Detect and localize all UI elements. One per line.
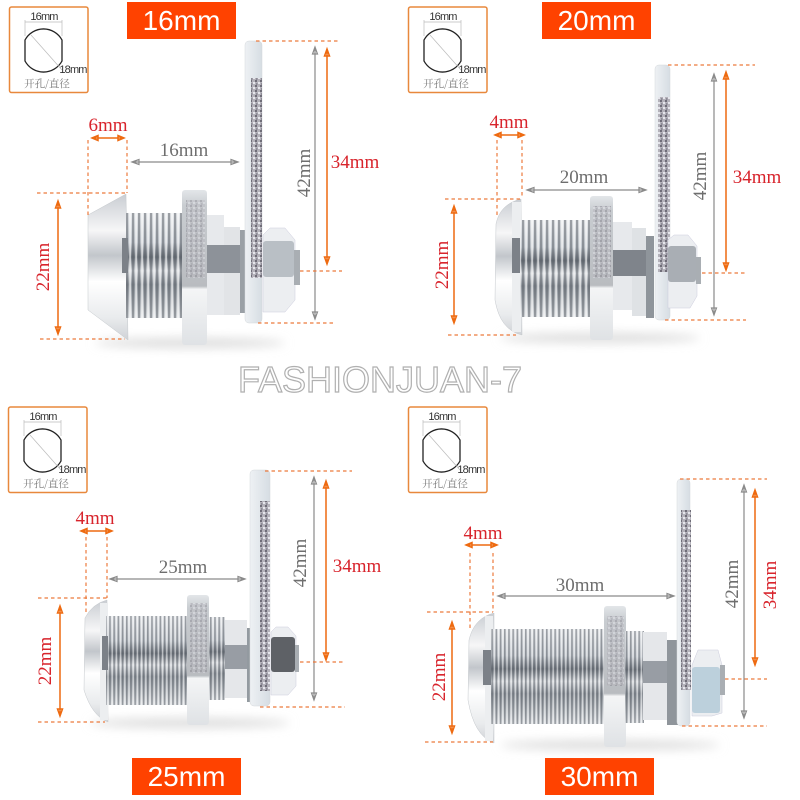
measure: 22mm: 22mm (35, 637, 56, 685)
measure: 42mm: 42mm (722, 560, 743, 608)
cutout diagram: 16mm (429, 11, 457, 23)
measure: 25mm depth (110, 557, 245, 582)
measure: 4mm (463, 523, 503, 630)
measure: 34mm: 34mm (333, 556, 381, 577)
measure: 34mm (725, 490, 781, 679)
measure: 42mm: 42mm (294, 149, 315, 197)
cutout diagram: 开孔/直径 (423, 76, 469, 91)
cutout diagram (8, 407, 87, 492)
measure: 34mm: 34mm (760, 561, 781, 609)
measure: 22mm (33, 193, 127, 339)
cutout diagram: 16mm (29, 411, 57, 423)
measure: 4mm (489, 112, 529, 215)
measure: 42mm (680, 479, 767, 726)
size badge 30mm: 30mm (561, 761, 638, 792)
lock (84, 470, 299, 728)
cutout diagram: 18mm (58, 464, 86, 476)
measure: 30mm depth: 30mm (556, 575, 604, 596)
measure: 42mm (256, 41, 340, 323)
size badge 20mm (542, 2, 651, 39)
cutout diagram: 18mm (59, 64, 87, 76)
measure: 22mm (425, 612, 493, 742)
cutout diagram: 16mm (428, 411, 456, 423)
measure: 22mm: 22mm (33, 243, 54, 291)
panel: 16mm lock (10, 2, 379, 348)
cutout diagram: 开孔/直径 (24, 76, 70, 91)
cutout diagram: 开孔/直径 (422, 476, 468, 491)
panel: 20mm lock (408, 2, 781, 343)
measure: 20mm depth (527, 167, 646, 192)
measure: 34mm (300, 49, 379, 271)
measure: 34mm: 34mm (331, 152, 379, 173)
measure: 4mm: 4mm (75, 508, 115, 529)
cutout diagram: 18mm (457, 464, 485, 476)
measure: 42mm (260, 471, 352, 707)
cutout diagram (408, 407, 487, 492)
measure: 42mm: 42mm (690, 152, 711, 200)
measure: 22mm: 22mm (429, 653, 450, 701)
lock (88, 41, 300, 348)
cutout diagram (10, 7, 88, 92)
size badge 16mm: 16mm (143, 5, 220, 36)
cutout diagram: 开孔/直径 (23, 476, 69, 491)
lock (495, 65, 701, 343)
cutout diagram: 18mm (458, 64, 486, 76)
size badge 25mm: 25mm (148, 761, 225, 792)
measure: 4mm: 4mm (489, 112, 529, 133)
measure: 4mm: 4mm (463, 523, 503, 544)
size badge 25mm (132, 758, 241, 795)
measure: 16mm depth (132, 140, 238, 164)
cutout diagram (408, 7, 487, 92)
measure: 22mm (35, 598, 108, 722)
size badge 16mm (127, 2, 236, 39)
measure: 34mm (300, 481, 381, 662)
measure: 42mm: 42mm (290, 539, 311, 587)
measure: 4mm (75, 508, 115, 615)
size badge 20mm: 20mm (558, 5, 635, 36)
watermark: FASHIONJUAN-7 (238, 359, 522, 400)
measure: 34mm: 34mm (733, 167, 781, 188)
panel: 25mm lock (8, 407, 381, 795)
cutout diagram: 16mm (30, 11, 58, 23)
panel: 30mm lock (408, 407, 781, 795)
measure: 16mm depth: 16mm (160, 140, 208, 161)
size badge 30mm (545, 758, 654, 795)
measure: 42mm (665, 65, 755, 320)
measure: 22mm: 22mm (432, 241, 453, 289)
measure: 6mm (88, 115, 128, 215)
measure: 34mm (702, 72, 781, 273)
measure: 25mm depth: 25mm (159, 557, 207, 578)
measure: 30mm depth (498, 575, 674, 598)
measure: 22mm (432, 199, 523, 335)
measure: 20mm depth: 20mm (560, 167, 608, 188)
measure: 6mm: 6mm (88, 115, 128, 136)
lock (468, 479, 725, 750)
